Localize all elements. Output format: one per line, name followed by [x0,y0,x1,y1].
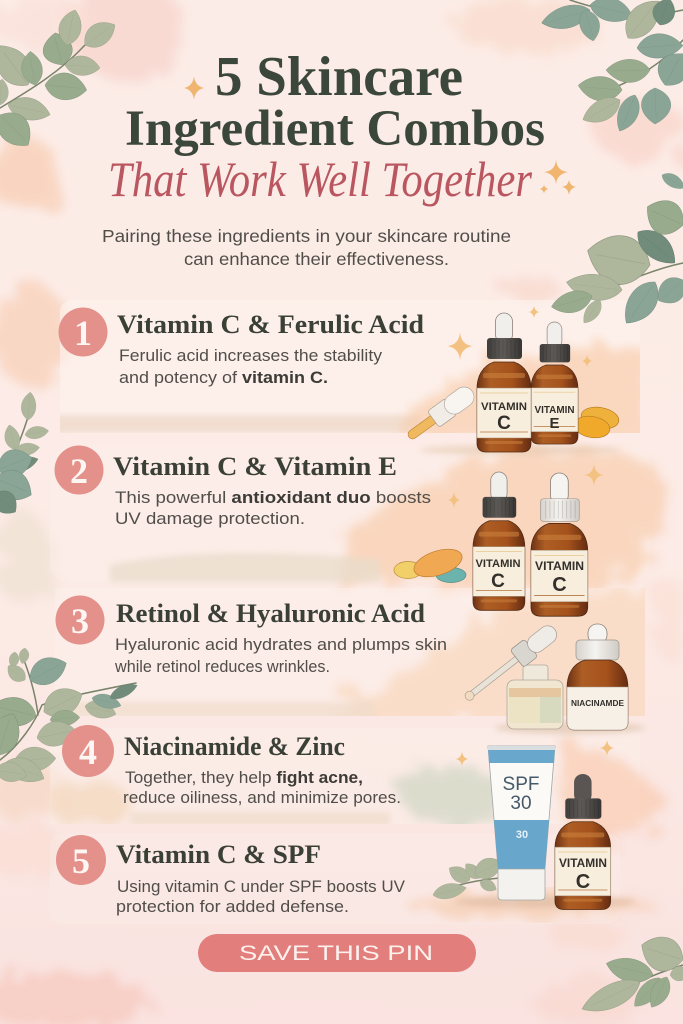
icon: vitamin E capsules [572,404,621,440]
product: vitamin E bottle [531,322,578,444]
product: vitamin C bottle, combo 5: C [576,871,590,893]
product: vitamin C bottle, combo 2 right [531,473,588,616]
combo 5: Vitamin C and SPF: protection for added defense. [116,898,349,916]
combo 1: Vitamin C and Ferulic Acid: Vitamin C & Ferulic Acid [117,309,424,339]
product: vitamin C bottle, combo 2 right: C [552,574,567,596]
intro text [102,226,511,269]
combo 3: Retinol and Hyaluronic Acid: Retinol & Hyaluronic Acid [116,598,425,628]
number badge 2: 2 [70,451,88,491]
combo 5: Vitamin C and SPF: Vitamin C & SPF [116,839,321,869]
number badge 3: 3 [71,601,89,641]
product: capsules for combo 2 [394,544,466,582]
combo 4: Niacinamide and Zinc: reduce oiliness, and minimize pores. [123,789,401,807]
combo 4: Niacinamide and Zinc: Together, they help fight acne, [125,769,363,787]
combo 3: Retinol and Hyaluronic Acid [56,596,447,676]
icon: dropper [459,621,561,707]
product: vitamin C bottle, combo 1: VITAMIN [481,401,527,413]
product: vitamin C bottle, combo 2 left [473,472,525,610]
subtitle: That Work Well Together: That Work Well Together [108,151,532,207]
product: vitamin C bottle, combo 5 [555,774,611,910]
combo 3: Retinol and Hyaluronic Acid: while retinol reduces wrinkles. [114,658,330,676]
product: SPF 30 tube: 30 [510,793,532,814]
number badge 1: 1 [74,313,92,353]
combo 2: Vitamin C and Vitamin E: This powerful antioxidant duo boosts [115,489,431,507]
foliage: left mid branch [0,391,50,520]
foliage: bottom right branch [577,930,683,1020]
product: vitamin C bottle, combo 2 right: VITAMIN [535,561,584,573]
combo 5: Vitamin C and SPF: Using vitamin C under SPF boosts UV [117,878,405,896]
combo 2: Vitamin C and Vitamin E: UV damage protection. [115,510,305,528]
number badge 5: 5 [72,841,90,881]
icon: pipette [403,383,478,445]
panel: combo 2 background [50,446,659,582]
title: 5 Skincare Ingredient Combos: 5 Skincare [215,46,463,108]
product: niacinamide bottle [567,624,628,730]
product: vitamin C bottle, combo 1: C [497,413,511,434]
product: vitamin C bottle, combo 2 left: C [491,571,505,592]
combo 2: Vitamin C and Vitamin E: Vitamin C & Vitamin E [113,451,397,481]
combo 5: Vitamin C and SPF [56,835,405,916]
product: dropper and capsules for combo 1 [403,383,621,455]
number badge 3 [56,596,104,644]
product: vitamin C bottle, combo 2 left: VITAMIN [476,558,521,570]
product: vitamin E bottle: E [549,415,560,432]
panel: combo 3 background [72,588,645,716]
foliage: left lower branch [0,647,139,788]
product: glass jar and dropper [459,621,645,734]
combo 4: Niacinamide and Zinc [62,725,401,807]
panel: combo 4 background [50,762,494,824]
panel: combo 1 background [50,300,645,440]
product: SPF 30 tube: 30 [516,829,528,841]
number badge 4 [62,725,114,777]
intro text: Pairing these ingredients in your skincare routine [102,226,511,246]
number badge 5 [56,835,106,885]
product: vitamin C bottle, combo 1 [477,313,531,452]
number badge 2 [54,446,104,494]
intro text: can enhance their effectiveness. [184,249,449,269]
foliage: right branch [549,169,683,331]
combo 3: Retinol and Hyaluronic Acid: Hyaluronic acid hydrates and plumps skin [115,636,447,654]
product: SPF 30 tube [455,746,635,908]
combo 1: Vitamin C and Ferulic Acid [58,308,424,387]
combo 4: Niacinamide and Zinc: Niacinamide & Zinc [124,731,345,761]
product: niacinamide bottle: NIACINAMDE [571,698,624,708]
product: vitamin C bottle, combo 5: VITAMIN [559,856,607,870]
sparkles near products [447,306,614,766]
combo 1: Vitamin C and Ferulic Acid: and potency of vitamin C. [119,369,328,387]
number badge 4: 4 [79,732,97,772]
call to action: Save this pin [198,934,476,972]
icon: jar [507,665,563,729]
peach wash behind combo 5 products [560,745,668,847]
combo 2: Vitamin C and Vitamin E [54,446,431,528]
foliage: top left branch [0,7,121,154]
sparkles around title [184,76,576,195]
product: vitamin E bottle: VITAMIN [534,405,574,416]
product: SPF 30 tube: SPF [503,774,539,795]
title: 5 Skincare Ingredient Combos: Ingredient Combos [125,101,545,157]
foliage: top right branch [539,0,683,135]
foliage: sprig beside tube [431,853,506,902]
number badge 1 [58,308,108,356]
combo 1: Vitamin C and Ferulic Acid: Ferulic acid increases the stability [119,347,383,365]
call to action: Save this pin: SAVE THIS PIN [239,942,433,965]
panel: combo 5 background [50,834,655,924]
title: 5 Skincare Ingredient Combos [125,46,545,157]
